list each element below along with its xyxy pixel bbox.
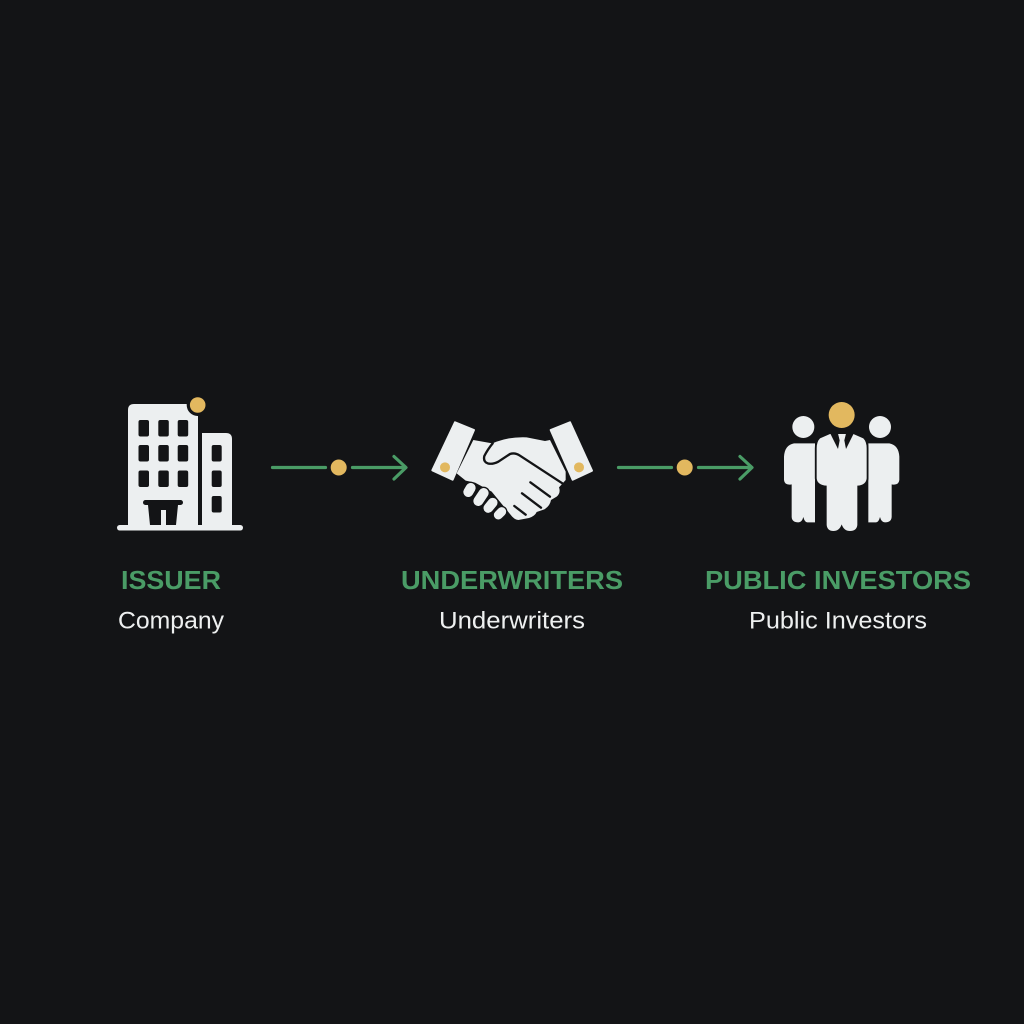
icon: right cuff (551, 422, 592, 480)
icon: gold lead investor head (829, 402, 855, 428)
arrow: underwriters to public investors (618, 456, 752, 479)
icon: left cuff (432, 422, 474, 480)
label: public investors: PUBLIC INVESTORS (705, 565, 971, 595)
label: underwriters (401, 565, 623, 634)
label: public investors: Public Investors (749, 608, 927, 634)
label: underwriters: Underwriters (439, 608, 585, 634)
label: issuer: ISSUER (121, 565, 221, 595)
icon: gold status dot (190, 397, 206, 413)
label: issuer: Company (118, 608, 224, 634)
icon: office buildings (117, 394, 243, 530)
label: underwriters: UNDERWRITERS (401, 565, 623, 595)
label: issuer (118, 565, 224, 634)
icon: handshake (432, 422, 592, 520)
arrow: issuer to underwriters (272, 456, 406, 479)
label: public investors (705, 565, 971, 634)
icon: group of investors (784, 402, 899, 531)
